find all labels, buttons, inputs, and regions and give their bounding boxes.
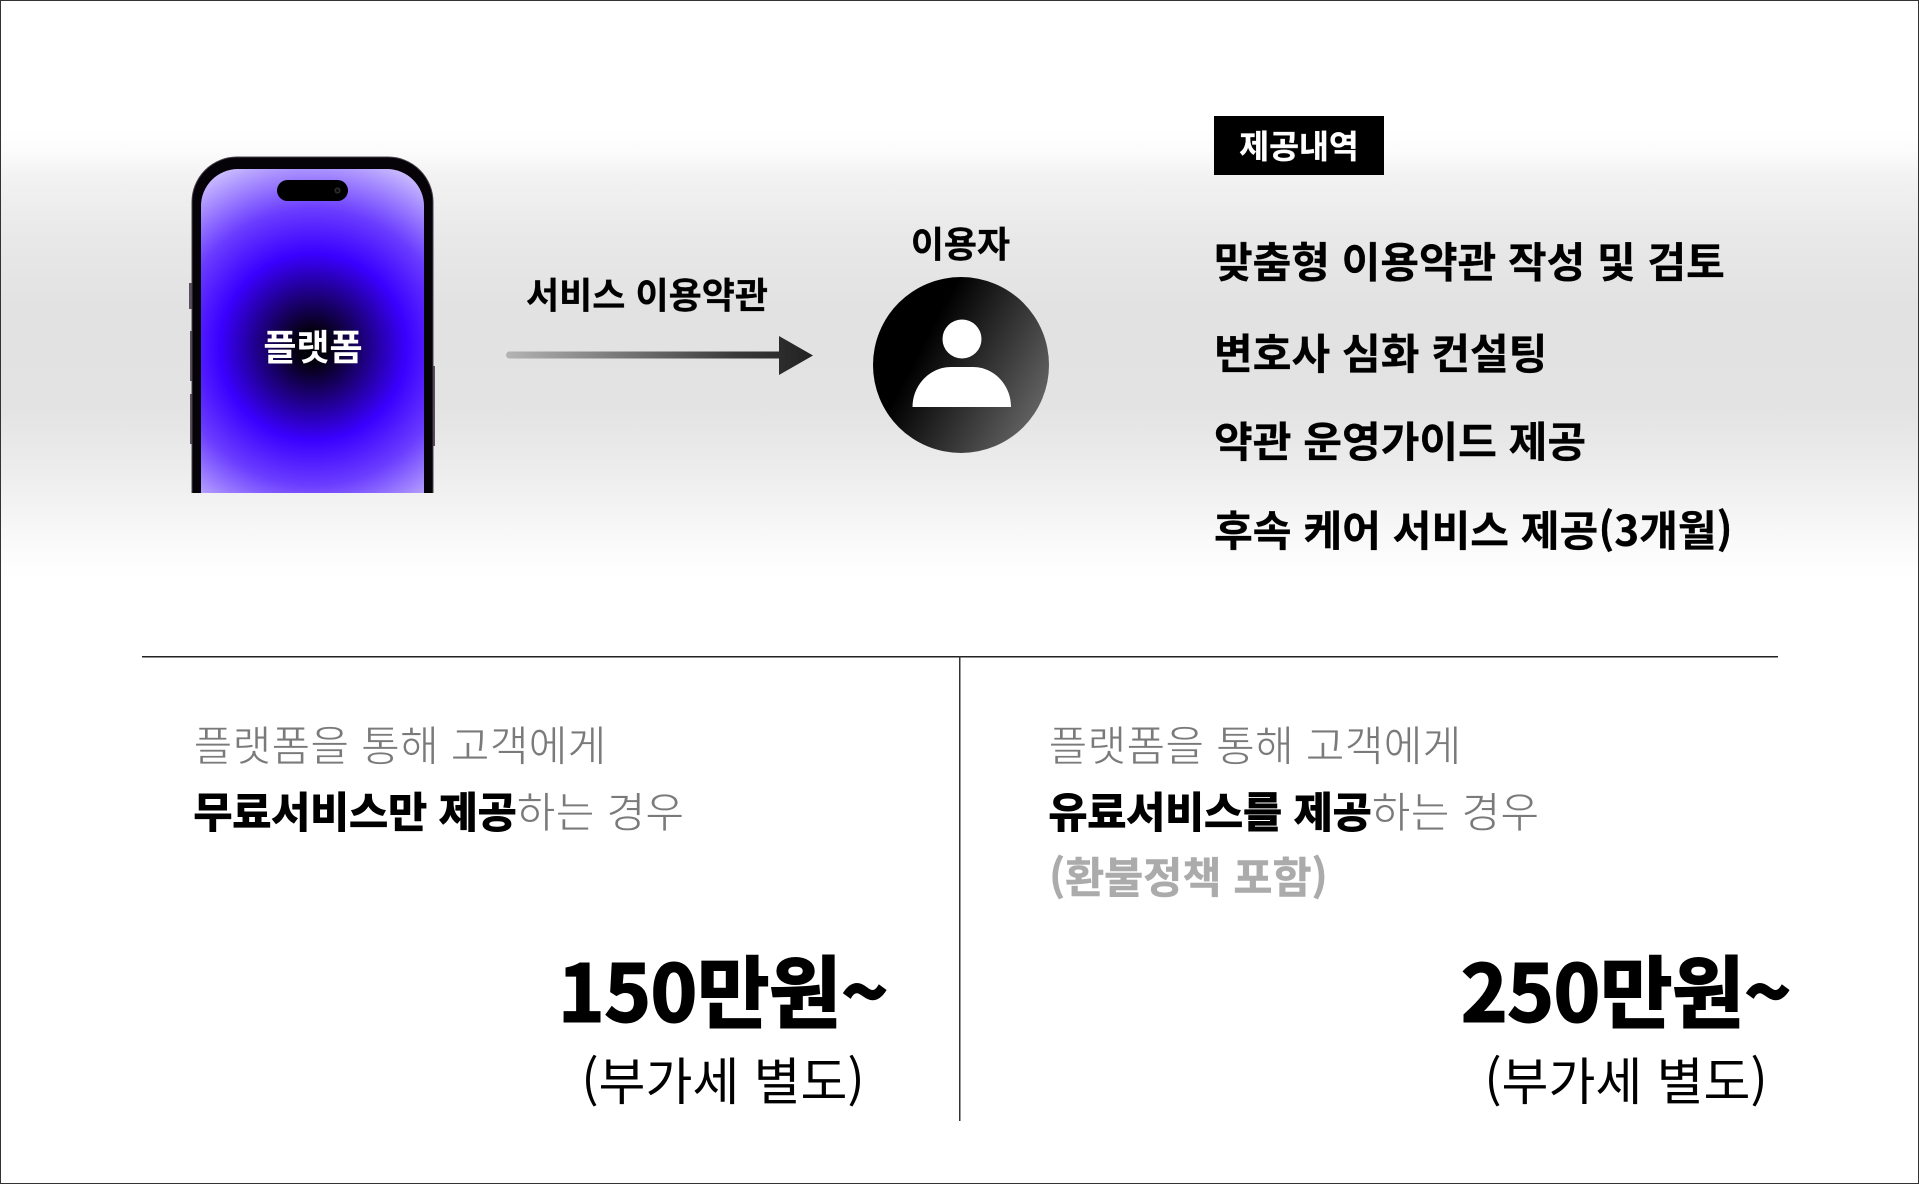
phone screen <box>201 169 424 493</box>
phone side buttons <box>189 283 435 446</box>
description text: 플랫폼을 통해 고객에게 <box>1048 713 1461 774</box>
description text: 무료서비스만 제공하는 경우 <box>194 780 684 840</box>
price: 250만원~ <box>1461 930 1791 1044</box>
list of items: 변호사 심화 컨설팅 <box>1214 321 1547 382</box>
user head <box>942 320 982 358</box>
VAT note: (부가세 별도) <box>581 1041 865 1115</box>
camera lens <box>335 188 340 193</box>
arrow head <box>779 336 813 375</box>
VAT note: (부가세 별도) <box>1484 1041 1768 1115</box>
arrow shaft <box>506 352 782 358</box>
arrow: service terms to user <box>506 267 813 375</box>
phone body <box>192 156 434 493</box>
panel: paid service pricing <box>1048 713 1791 1115</box>
description text: (환불정책 포함) <box>1049 845 1328 906</box>
dynamic island <box>277 180 348 201</box>
list of items <box>1214 230 1733 559</box>
user shoulders <box>912 367 1011 407</box>
divider: horizontal <box>142 656 1778 658</box>
description text: 유료서비스를 제공하는 경우 <box>1048 780 1539 840</box>
user label: 이용자 <box>911 216 1010 268</box>
description text <box>1048 713 1539 906</box>
price: 150만원~ <box>558 930 888 1044</box>
description text: 플랫폼을 통해 고객에게 <box>194 713 606 774</box>
phone label: 플랫폼 <box>263 319 363 371</box>
description text <box>194 713 684 840</box>
panel: free service pricing <box>194 713 888 1115</box>
heading badge <box>1214 116 1384 175</box>
gradient band <box>1 128 1918 578</box>
arrow label: 서비스 이용약관 <box>526 267 768 319</box>
list of items: 맞춤형 이용약관 작성 및 검토 <box>1214 230 1725 290</box>
user circle <box>873 277 1049 453</box>
list of items: 약관 운영가이드 제공 <box>1214 409 1586 470</box>
heading badge: 제공내역 <box>1239 121 1359 168</box>
icon: user <box>873 216 1049 453</box>
list of items: 후속 케어 서비스 제공(3개월) <box>1214 498 1733 559</box>
panel: provided items <box>1214 116 1733 559</box>
divider: vertical <box>959 656 960 1121</box>
icon: phone labelled platform <box>189 156 435 493</box>
